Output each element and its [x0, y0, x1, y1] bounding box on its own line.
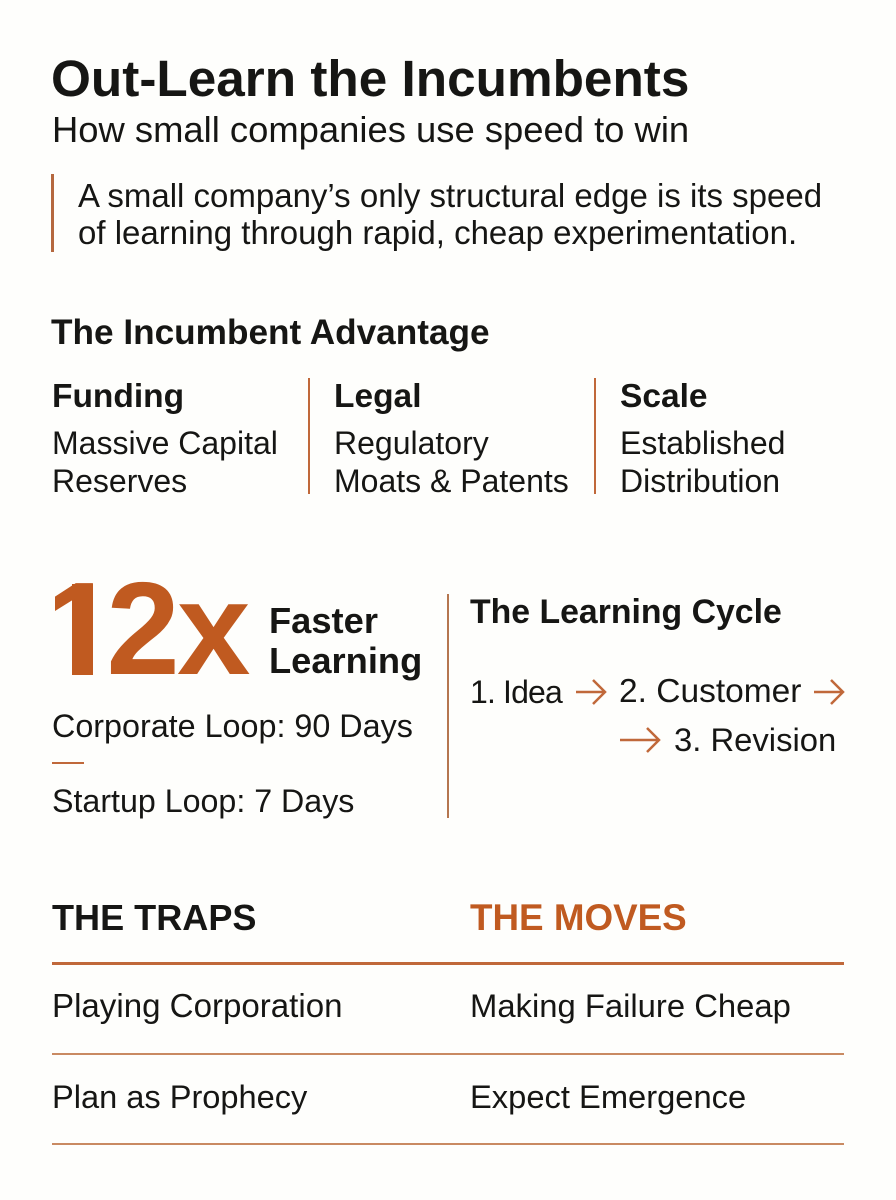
cycle step 3: 3. Revision — [674, 721, 836, 758]
big stat: 12x: x — [177, 555, 250, 702]
callout text: A small company’s only structural edge is its speed — [78, 176, 822, 214]
stat label — [269, 600, 422, 680]
scale divider — [594, 378, 596, 494]
big stat: 12x: 2 — [106, 555, 180, 702]
move 1: Making Failure Cheap — [470, 987, 791, 1024]
callout text — [78, 176, 822, 251]
funding text: Massive Capital — [52, 425, 278, 461]
callout accent bar — [51, 174, 54, 252]
thesis callout — [51, 174, 822, 252]
arrow 1 — [576, 679, 607, 705]
column: funding — [52, 378, 278, 498]
trap 1: Playing Corporation — [52, 988, 343, 1025]
table rule bottom — [52, 1143, 844, 1145]
legal text: Regulatory — [334, 425, 489, 461]
funding text: Reserves — [52, 462, 187, 498]
subtitle: How small companies use speed to win — [52, 109, 689, 150]
vertical divider — [447, 594, 449, 818]
stat label: Faster — [269, 600, 378, 640]
arrow 2 — [814, 679, 845, 705]
big stat: 12x: 1 — [44, 555, 117, 702]
title: Out-Learn the Incumbents — [51, 50, 689, 107]
scale text: Distribution — [620, 462, 780, 498]
cycle step 2: 2. Customer — [619, 673, 801, 710]
section heading: incumbent advantage: The Incumbent Advantage — [51, 313, 490, 352]
big stat: 12x — [55, 555, 250, 702]
callout text: of learning through rapid, cheap experimentation. — [78, 214, 797, 251]
moves heading: THE MOVES — [470, 897, 687, 938]
legal heading: Legal — [334, 378, 422, 415]
column: legal — [308, 378, 569, 498]
table rule top — [52, 962, 844, 965]
scale text: Established — [620, 425, 785, 461]
cycle step 1: 1. Idea — [470, 674, 562, 710]
traps heading: THE TRAPS — [52, 897, 256, 938]
funding heading: Funding — [52, 378, 184, 415]
learning cycle heading: The Learning Cycle — [470, 593, 782, 631]
arrow 3 — [620, 727, 661, 753]
legal text — [334, 425, 569, 498]
legal divider — [308, 378, 310, 494]
startup loop text: Startup Loop: 7 Days — [52, 783, 354, 819]
column: scale — [594, 378, 785, 498]
stat label: Learning — [269, 640, 422, 680]
corporate loop text: Corporate Loop: 90 Days — [52, 708, 413, 744]
funding text — [52, 425, 278, 498]
move 2: Expect Emergence — [470, 1078, 746, 1115]
trap 2: Plan as Prophecy — [52, 1078, 307, 1115]
legal text: Moats & Patents — [334, 462, 569, 498]
table rule middle — [52, 1053, 844, 1055]
scale heading: Scale — [620, 378, 708, 415]
scale text — [620, 425, 785, 498]
small divider — [52, 762, 84, 764]
